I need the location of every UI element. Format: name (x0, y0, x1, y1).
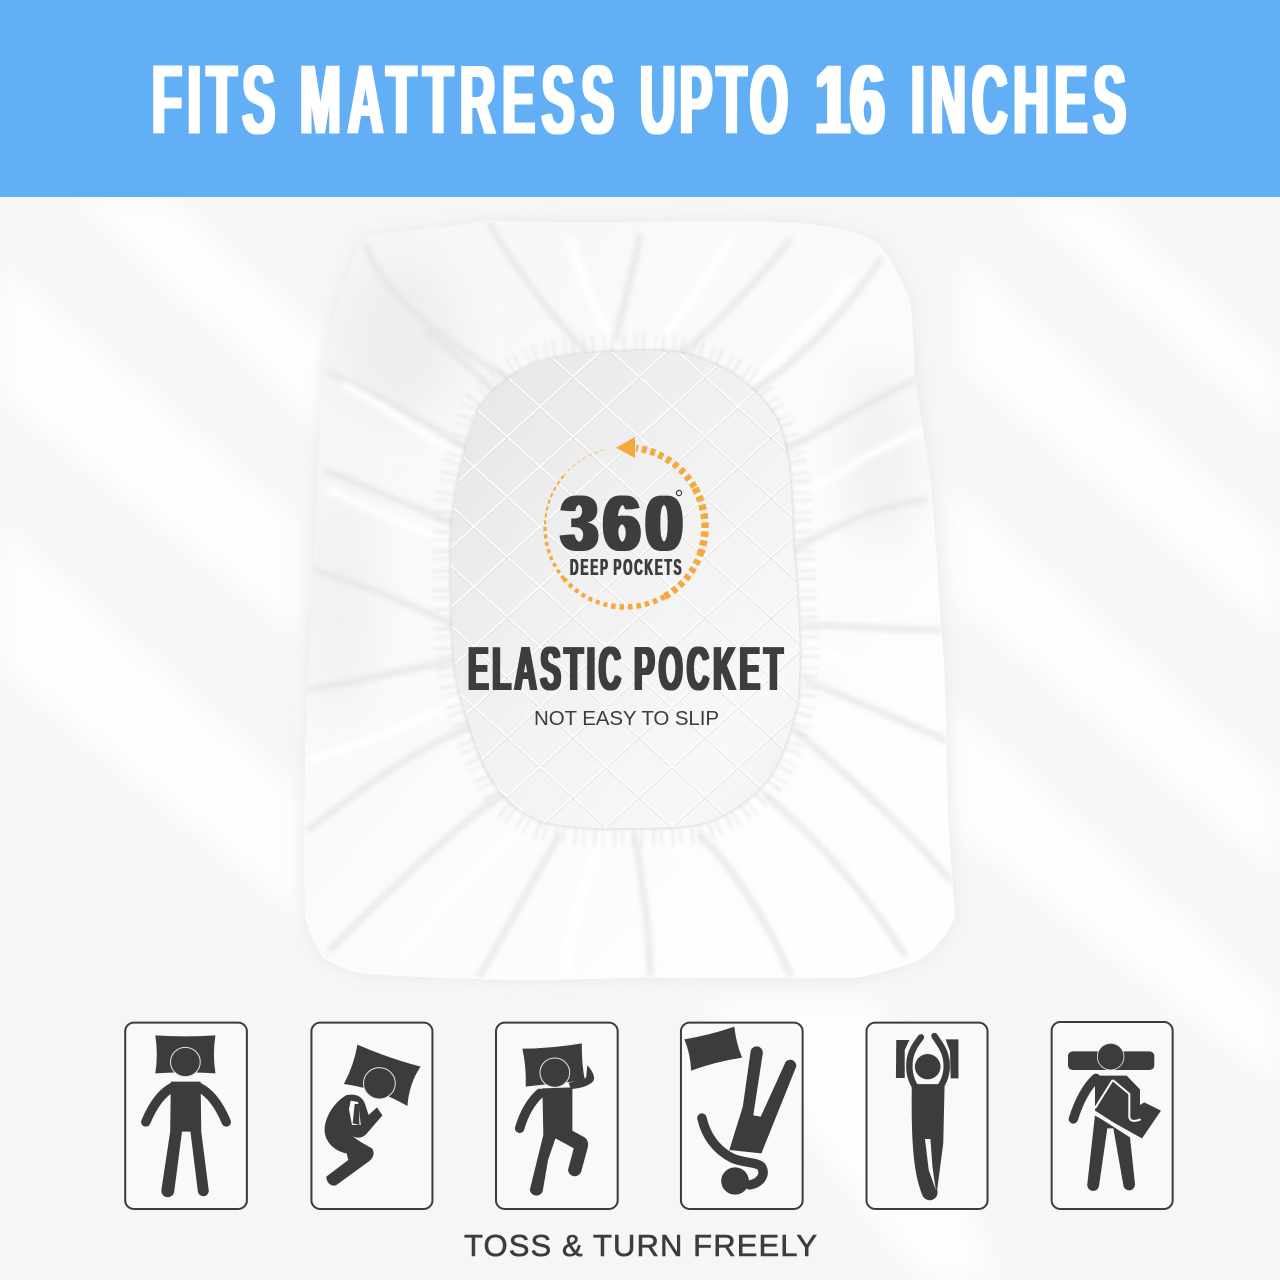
progress ring (545, 448, 705, 607)
icon: sleeper on back (125, 1023, 247, 1209)
fitted sheet (290, 210, 970, 990)
degree mark (676, 490, 682, 496)
icon: curled on side (311, 1023, 432, 1209)
long folds, highlight side (334, 342, 910, 508)
title (152, 46, 1126, 155)
elastic pocket heading (468, 636, 783, 704)
icon: arms overhead (867, 1023, 988, 1209)
icon: upside down with pillow thrown (681, 1023, 803, 1209)
icon: hugging body pillow (1052, 1022, 1173, 1209)
title: INCHES (911, 46, 1126, 155)
title: 16 (815, 47, 885, 155)
arrowhead (616, 437, 635, 458)
not easy to slip subheading: NOT EASY TO SLIP (534, 707, 719, 730)
360 numeral: 360 (561, 480, 683, 567)
deep pockets label: DEEP (570, 553, 608, 580)
elastic gathers around the pocket (441, 342, 810, 838)
deep pockets label (570, 553, 682, 580)
top banner (0, 0, 1280, 197)
pocket quilted panel (451, 351, 800, 828)
long folds, shadow side (308, 225, 950, 975)
caption: TOSS & TURN FREELY (464, 1228, 817, 1263)
title: FITS (152, 46, 275, 155)
elastic pocket heading: POCKET (634, 636, 783, 704)
elastic pocket heading: ELASTIC (468, 636, 621, 704)
icon: running pose (496, 1023, 618, 1209)
title: MATTRESS (300, 46, 614, 155)
deep pockets label: POCKETS (614, 553, 682, 580)
360 badge (545, 437, 705, 607)
soft shade zones (334, 284, 904, 644)
title: UPTO (640, 46, 788, 155)
pocket edge shadow (451, 351, 800, 828)
